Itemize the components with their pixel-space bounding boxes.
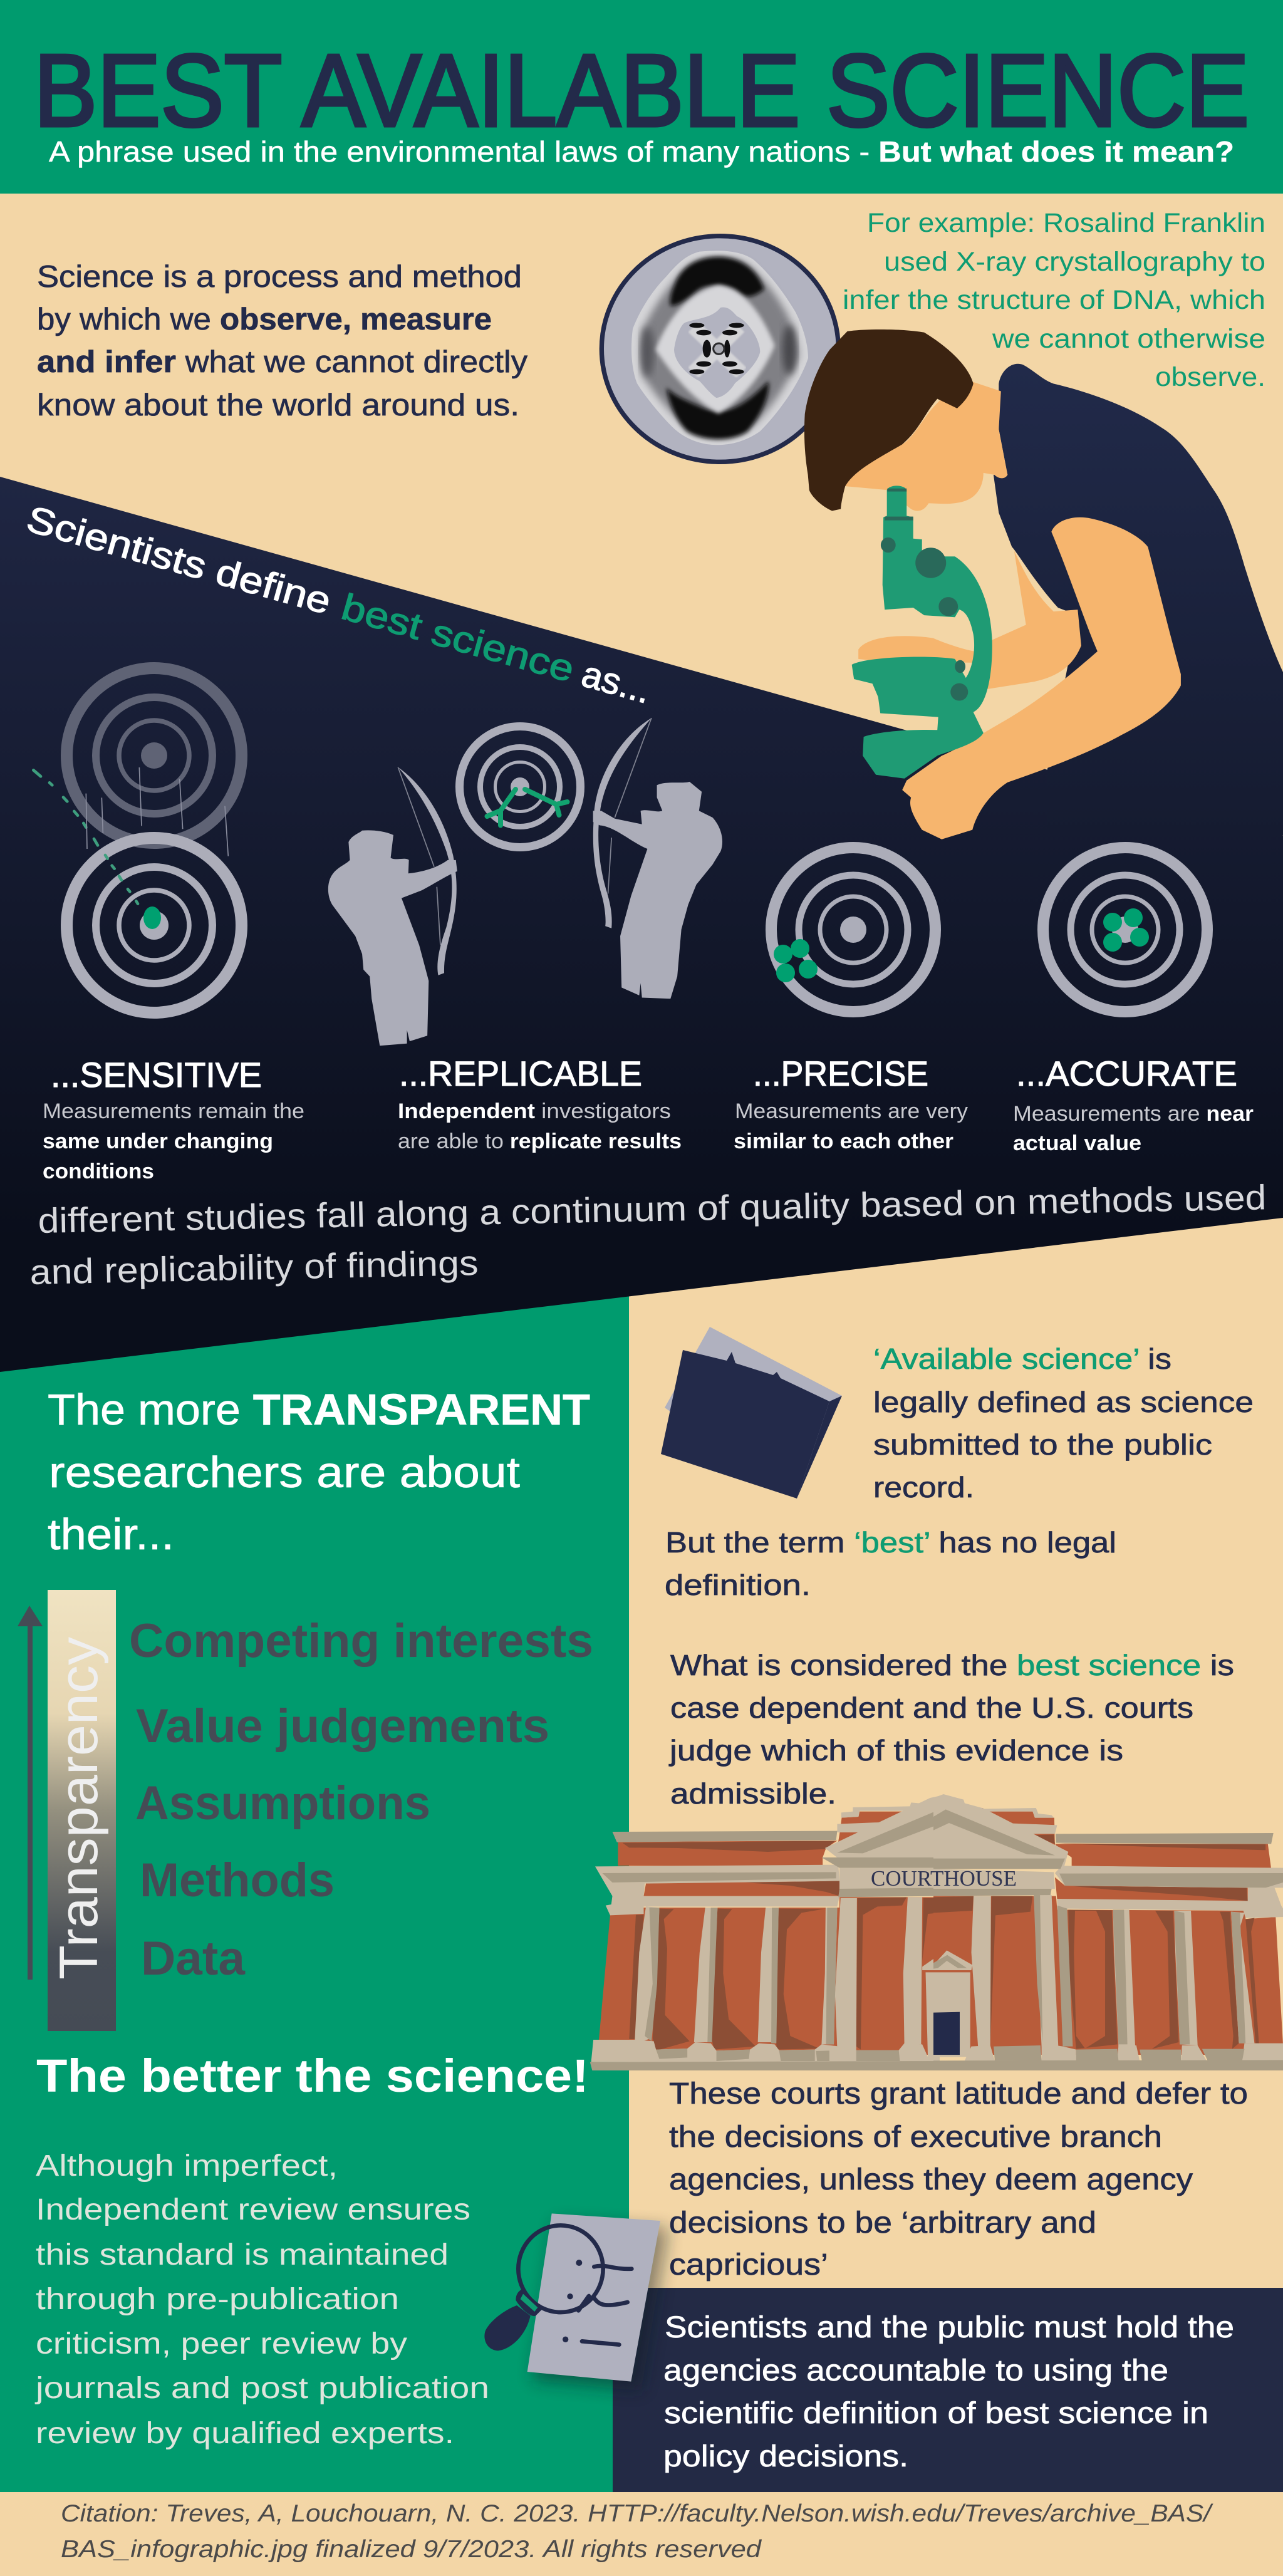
text block: Rosalind Franklin example: For example: Rosalind Franklin — [867, 208, 1265, 238]
text block: available science: legally defined as science — [873, 1386, 1254, 1418]
citation: BAS_infographic.jpg finalized 9/7/2023. All rights reserved — [61, 2536, 762, 2563]
text block: available science — [873, 1343, 1254, 1504]
heading: scientists define best science: best science — [337, 586, 579, 690]
text block: continuum of quality: different studies fall along a continuum of quality based on methods used — [38, 1177, 1267, 1240]
face and neck — [845, 382, 1007, 511]
X reflections — [693, 327, 741, 373]
list: transparency items — [129, 1614, 593, 1985]
label: sensitive: conditions — [43, 1160, 154, 1183]
list: transparency items: Value judgements — [136, 1700, 549, 1753]
paper text marks — [563, 2260, 582, 2342]
panel: call to action — [613, 2288, 1283, 2492]
measurement trace — [33, 767, 228, 904]
hair — [804, 330, 974, 511]
text block: best has no legal definition: definition. — [665, 1569, 811, 1601]
panel: call to action: scientific definition of best science in — [664, 2397, 1208, 2430]
icon: precise target — [771, 848, 935, 1012]
microscope — [852, 486, 992, 779]
illustration: courthouse — [590, 1794, 1283, 2070]
heading: the better the science: The better the science! — [36, 2050, 589, 2102]
text block: Rosalind Franklin example: observe. — [1155, 362, 1265, 392]
text block: independent review: criticism, peer review by — [36, 2327, 407, 2360]
label: sensitive: Measurements remain the — [43, 1099, 304, 1123]
label: precise: similar to each other — [734, 1130, 953, 1153]
text block: available science: ‘Available science’ is — [873, 1343, 1171, 1375]
text block: independent review: review by qualified experts. — [36, 2417, 454, 2450]
label: replicable: Independent investigators — [398, 1099, 671, 1123]
central void — [674, 308, 760, 398]
text block: case dependent: admissible. — [670, 1777, 836, 1810]
dark diagonal band and green panel — [0, 477, 1283, 2492]
text block: independent review: journals and post publication — [34, 2372, 489, 2405]
right archer — [593, 782, 722, 999]
text block: courts defer to agencies — [669, 2077, 1248, 2282]
heading: the more transparent: their... — [48, 1510, 174, 1559]
list: transparency items: Competing interests — [129, 1614, 593, 1668]
text block: definition of science: Science is a process and method — [37, 260, 522, 294]
text block: Rosalind Franklin example: infer the structure of DNA, which — [843, 285, 1265, 315]
near arm — [902, 517, 1181, 839]
text block: independent review: Independent review ensures — [36, 2193, 470, 2226]
paper — [527, 2213, 660, 2382]
text block: definition of science: and infer what we cannot directly — [37, 345, 528, 379]
magnifier — [484, 2225, 603, 2350]
icon: folder — [661, 1327, 842, 1498]
icon: paper and magnifier — [484, 2213, 668, 2391]
text block: case dependent — [668, 1649, 1234, 1810]
light inner ring — [656, 285, 775, 413]
text block: courts defer to agencies: decisions to be ‘arbitrary and — [669, 2206, 1096, 2240]
panel: call to action: policy decisions. — [663, 2440, 908, 2473]
text block: courts defer to agencies: capricious’ — [669, 2248, 828, 2282]
microscope knobs — [881, 489, 968, 701]
label: sensitive: ...SENSITIVE — [51, 1055, 262, 1094]
chart: transparency gradient bar — [48, 1590, 116, 2031]
icon: replicable target with arrows — [460, 727, 580, 847]
label: precise: ...PRECISE — [753, 1054, 928, 1093]
label: accurate — [1013, 1054, 1254, 1155]
text block: independent review: through pre-publication — [36, 2283, 399, 2316]
text block: definition of science: by which we observe, measure — [37, 303, 492, 336]
left archer — [328, 830, 457, 1046]
text block: best has no legal definition: But the term ‘best’ has no legal — [665, 1526, 1116, 1559]
icon: archers — [328, 718, 722, 1046]
label: sensitive — [43, 1055, 304, 1183]
chart: transparency gradient bar: Transparency — [49, 1637, 109, 1980]
text block: continuum of quality — [29, 1177, 1267, 1292]
label: sensitive: same under changing — [43, 1130, 273, 1153]
label: replicable: are able to replicate results — [398, 1130, 682, 1153]
text block: independent review: Although imperfect, — [36, 2149, 338, 2183]
courthouse sign: COURTHOUSE — [871, 1866, 1017, 1891]
text block: independent review: this standard is maintained — [36, 2238, 449, 2272]
icon: X-ray diffraction lens — [601, 236, 838, 462]
heading: scientists define best science — [23, 498, 655, 712]
text block: continuum of quality: and replicability of findings — [29, 1243, 479, 1292]
text block: definition of science — [37, 260, 528, 422]
icon: sensitive targets — [33, 668, 242, 1012]
text block: courts defer to agencies: the decisions of executive branch — [669, 2121, 1162, 2154]
text block: case dependent: judge which of this evidence is — [668, 1734, 1123, 1767]
text block: courts defer to agencies: agencies, unless they deem agency — [669, 2163, 1193, 2196]
list: transparency items: Assumptions — [135, 1777, 430, 1830]
heading: the more transparent — [48, 1385, 590, 1559]
label: accurate: ...ACCURATE — [1016, 1054, 1237, 1093]
icon: accurate target — [1043, 848, 1207, 1012]
text block: definition of science: know about the world around us. — [37, 388, 519, 422]
text block: Rosalind Franklin example — [843, 208, 1265, 392]
label: replicable: ...REPLICABLE — [399, 1054, 642, 1093]
dark lobes — [670, 257, 764, 306]
text block: courts defer to agencies: These courts grant latitude and defer to — [669, 2077, 1248, 2111]
text block: case dependent: What is considered the best science is — [670, 1649, 1234, 1681]
citation: Citation: Treves, A, Louchouarn, N. C. 2023. HTTP://faculty.Nelson.wish.edu/Treves/archive_BAS/ — [61, 2500, 1214, 2527]
header banner — [0, 0, 1283, 194]
paper shadow — [532, 2222, 668, 2391]
text block: best has no legal definition — [665, 1526, 1116, 1601]
text block: Rosalind Franklin example: we cannot otherwise — [992, 324, 1265, 354]
far arm and hand — [858, 551, 1081, 689]
right bow — [593, 718, 652, 928]
panel: call to action: agencies accountable to using the — [663, 2354, 1168, 2387]
heading: scientists define best science: as... — [578, 653, 655, 712]
label: accurate: Measurements are near — [1013, 1102, 1254, 1126]
list: transparency items: Methods — [140, 1854, 335, 1907]
text block: case dependent: case dependent and the U.S. courts — [670, 1691, 1193, 1724]
label: precise: Measurements are very — [735, 1099, 968, 1123]
faded upper target — [66, 668, 242, 843]
heading: scientists define best science: Scientists define — [23, 498, 336, 622]
heading: the more transparent: researchers are about — [49, 1448, 520, 1497]
text block: independent review — [34, 2149, 489, 2450]
arrow: transparency increasing — [18, 1606, 43, 1980]
label: accurate: actual value — [1013, 1131, 1141, 1155]
illustration: scientist at microscope — [804, 330, 1283, 839]
text block: available science: record. — [873, 1471, 974, 1504]
text block: available science: submitted to the public — [873, 1428, 1212, 1461]
panel: call to action: Scientists and the public must hold the — [665, 2311, 1234, 2344]
list: transparency items: Data — [141, 1932, 246, 1985]
heading: the more transparent: The more TRANSPARENT — [48, 1385, 590, 1434]
text block: Rosalind Franklin example: used X-ray crystallography to — [884, 247, 1265, 277]
left bow — [398, 767, 457, 975]
subtitle: A phrase used in the environmental laws of many nations - But what does it mean? — [49, 135, 1234, 168]
label: precise — [734, 1054, 968, 1153]
lower target — [66, 838, 242, 1012]
shirt — [994, 364, 1283, 836]
citation — [61, 2500, 1214, 2563]
label: replicable — [398, 1054, 682, 1153]
